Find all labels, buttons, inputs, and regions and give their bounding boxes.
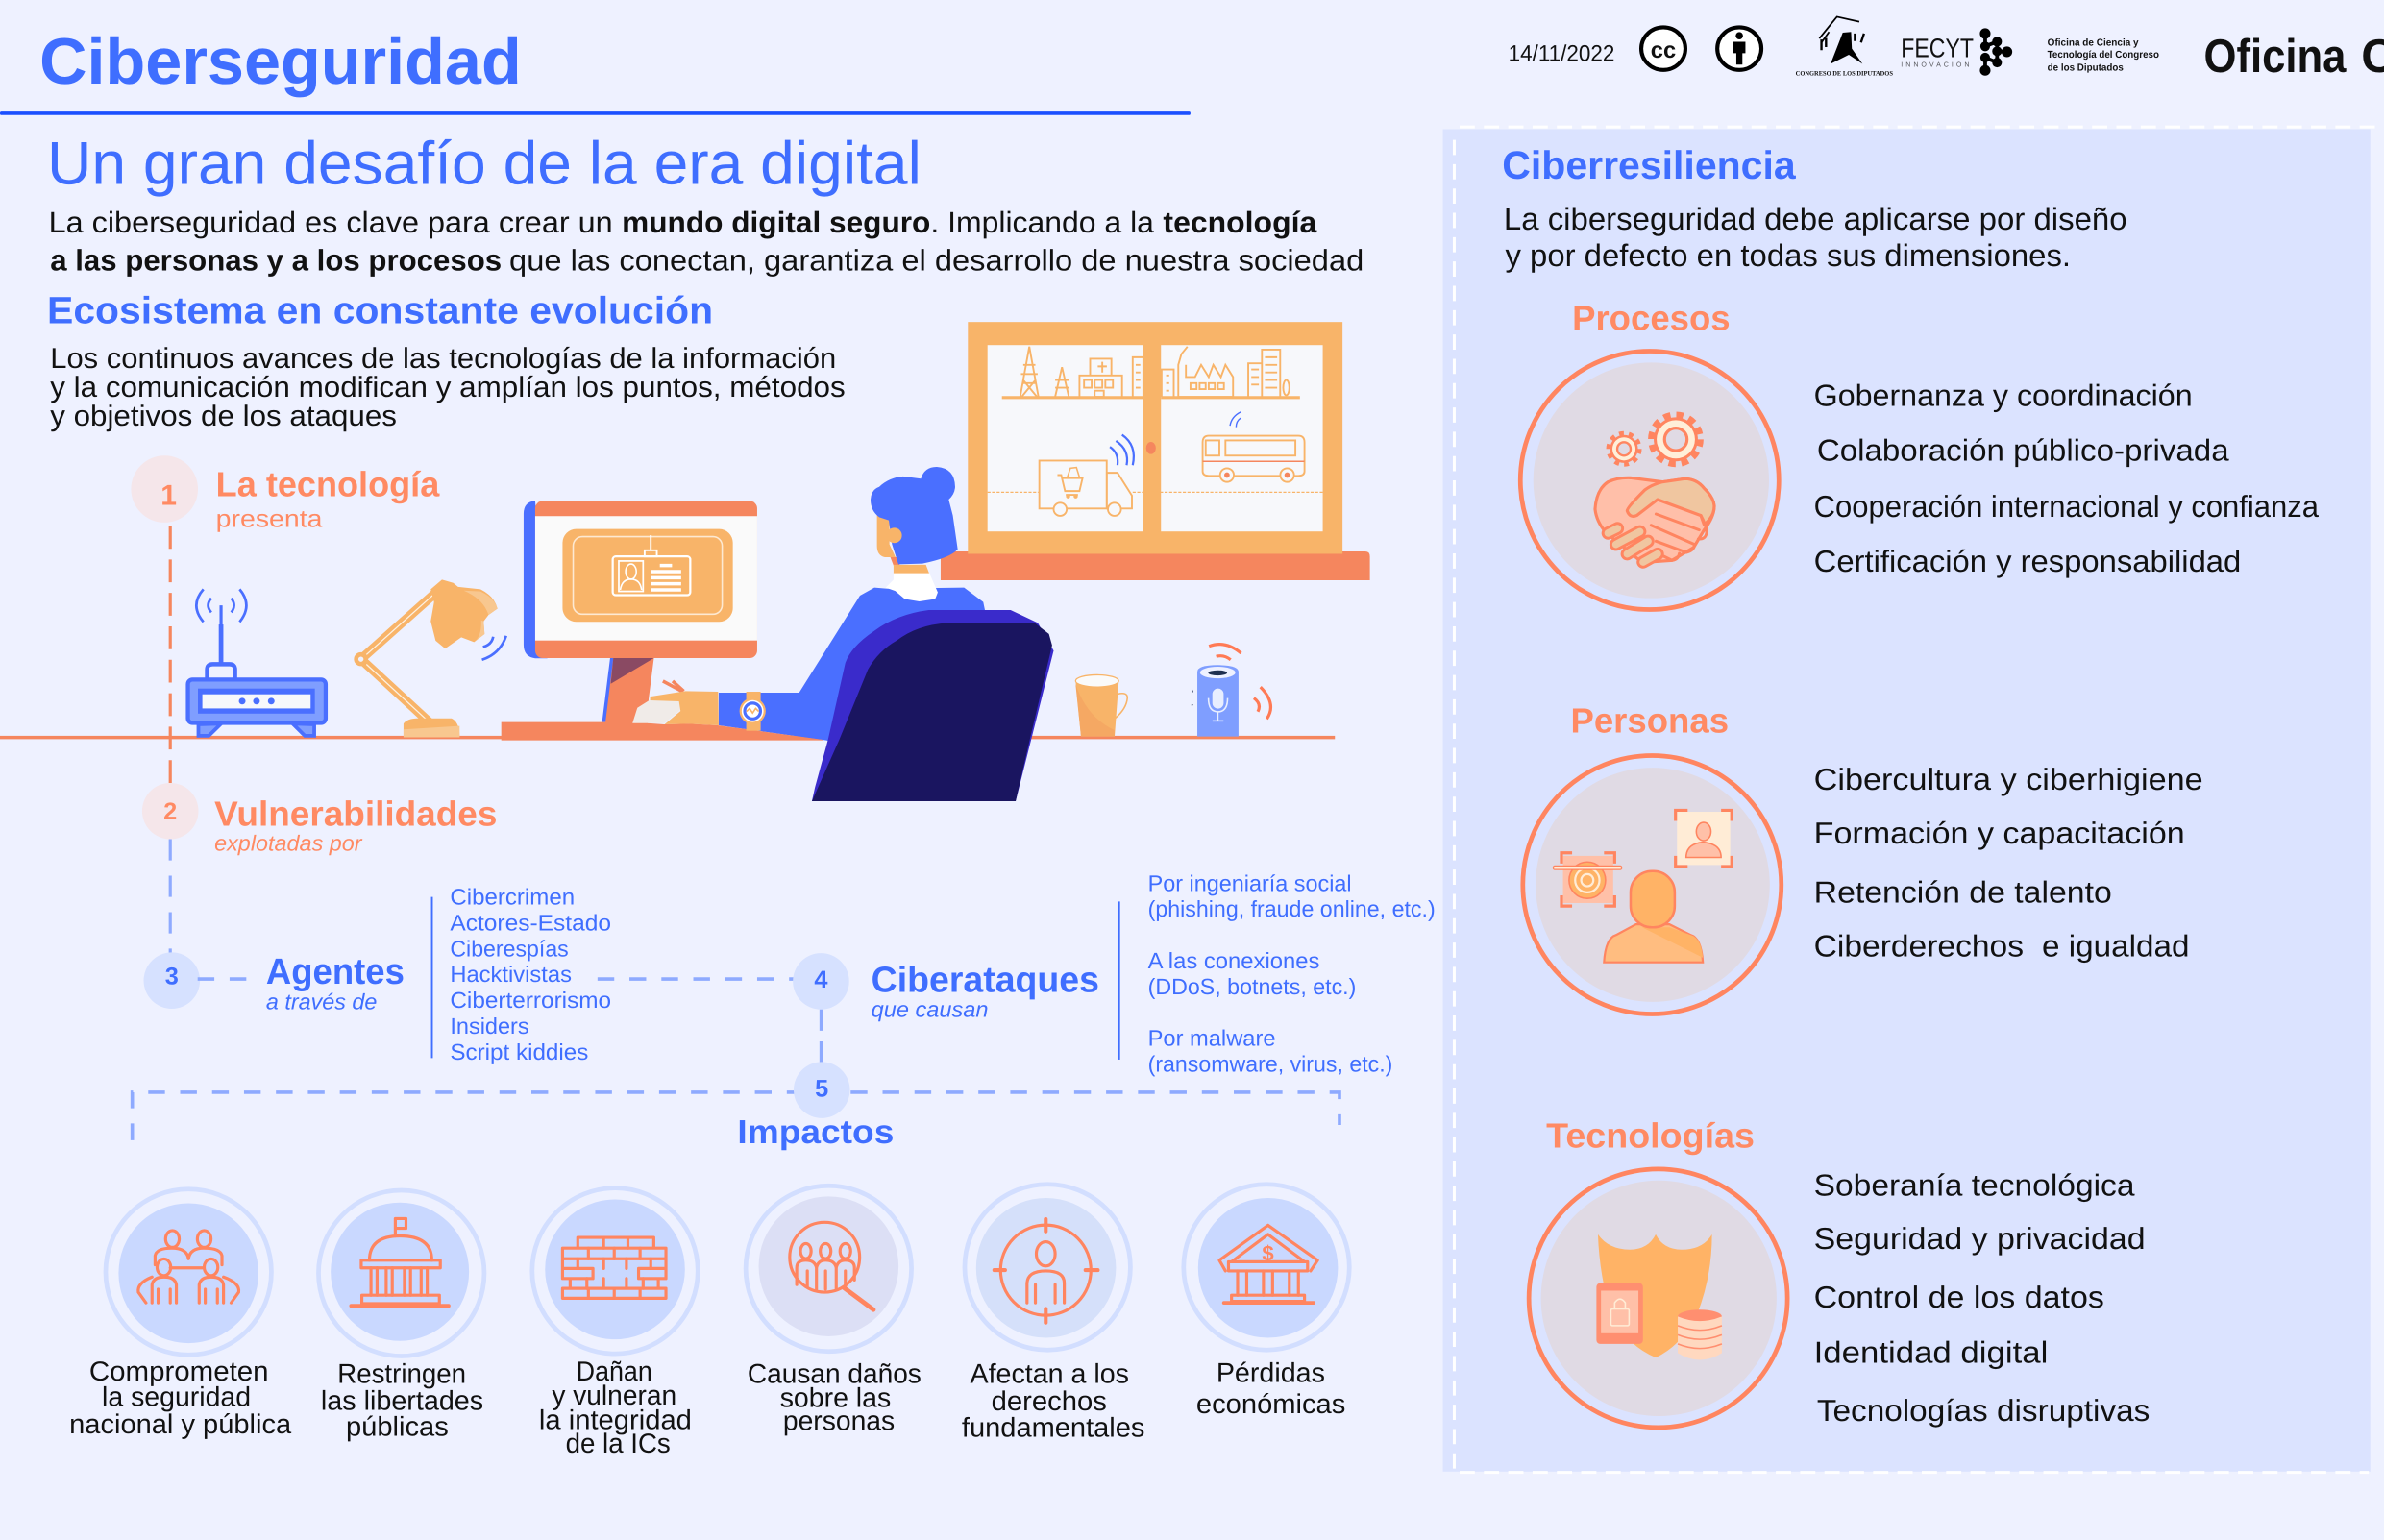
panel heading: Ciberresiliencia: [1502, 142, 1797, 188]
step 1: la tecnología: 1: [160, 480, 178, 512]
desk line: [0, 736, 1335, 739]
step 3: agentes: 3: [165, 965, 179, 990]
step 4: ciberataques: Ciberataques: [872, 960, 1099, 1001]
logo: oficina c: Oficina: [2204, 30, 2347, 83]
personas list: Ciberderechos: [1814, 930, 2024, 964]
person at desk: [502, 467, 1054, 801]
list: attack types: [1148, 872, 1436, 1078]
list: agents: Hacktivistas: [450, 964, 572, 989]
caption: Afectan a los: [970, 1358, 1129, 1389]
icon: bank: [1219, 1225, 1317, 1303]
wifi over bus: [1230, 412, 1241, 428]
logo: fecyt: INNOVACIÓN: [1901, 61, 1970, 68]
personas list: e igualdad: [2042, 930, 2189, 964]
caption: personas: [783, 1406, 895, 1436]
step 1: la tecnología: presenta: [216, 507, 323, 533]
ecosystem text block: [50, 344, 846, 433]
list: agents: Ciberespías: [450, 938, 569, 963]
list: attack types: A las conexiones: [1148, 950, 1319, 974]
caption: públicas: [346, 1411, 449, 1442]
procesos section: Procesos: [1572, 298, 1731, 337]
header: date: 14/11/2022: [1509, 41, 1614, 67]
intro text block: a las personas y a los procesos: [50, 245, 502, 279]
icon: magnifier with people: [790, 1222, 873, 1309]
step 5: impactos: [737, 1062, 894, 1151]
logo: fecyt: FECYT: [1901, 33, 1974, 63]
icon: group of people: [138, 1231, 239, 1303]
logo: fecyt: [1901, 28, 2012, 76]
step 1: la tecnología: [131, 455, 440, 533]
panel intro: y por defecto en todas sus dimensiones.: [1505, 238, 2071, 274]
caption: derechos: [992, 1386, 1107, 1416]
step 2: vulnerabilidades: Vulnerabilidades: [214, 794, 497, 833]
icon: shield, phone and data: [1596, 1234, 1722, 1359]
icon: bank: $: [1262, 1240, 1274, 1265]
procesos list: [1814, 380, 2320, 579]
step 2: vulnerabilidades: 2: [163, 799, 177, 825]
icon: attribution: [1717, 27, 1761, 70]
impact 2: libertades públicas: [318, 1190, 484, 1442]
caption: Dañan: [577, 1357, 652, 1386]
logo: oficina del congreso: Oficina de Ciencia y: [2048, 38, 2139, 49]
icon: capitol building: [352, 1218, 449, 1306]
step 4: ciberataques: que causan: [872, 999, 988, 1023]
caption: [539, 1357, 692, 1458]
caption: la integridad: [539, 1405, 692, 1435]
procesos list: Colaboración público-privada: [1817, 435, 2230, 468]
ecosystem text block: y la comunicación modifican y amplían los puntos, métodos: [50, 373, 846, 404]
city skyline: [1002, 347, 1300, 398]
personas list: Formación y capacitación: [1814, 818, 2185, 851]
logo: congreso: [1796, 16, 1894, 77]
intro text block: . Implicando a la: [930, 207, 1154, 240]
step 3: agentes: [144, 952, 405, 1015]
wrist watch: [740, 692, 766, 731]
caption: y vulneran: [552, 1381, 676, 1410]
personas list: [1814, 764, 2203, 964]
step 5: impactos: Impactos: [737, 1112, 894, 1151]
procesos list: Cooperación internacional y confianza: [1814, 491, 2320, 525]
caption: [1196, 1357, 1345, 1419]
intro text block: La ciberseguridad es clave para crear un: [49, 207, 613, 240]
panel: ciberresiliencia: [1443, 127, 2384, 1473]
impact 3: infraestructuras críticas: [532, 1188, 698, 1458]
procesos section: [1520, 298, 2320, 610]
wifi over truck: [1110, 435, 1134, 465]
list: agents: Actores-Estado: [450, 912, 611, 937]
impact 5: derechos fundamentales: [962, 1185, 1144, 1443]
procesos list: Certificación y responsabilidad: [1814, 546, 2241, 579]
caption: [962, 1358, 1144, 1443]
list: agents: Script kiddies: [450, 1041, 588, 1065]
impact 4: daños a personas: [746, 1186, 922, 1436]
intro text block: [49, 207, 1364, 279]
personas section: [1523, 700, 2203, 1014]
person torso and arm: [719, 588, 988, 760]
list: attack types: (phishing, fraude online, etc.): [1148, 898, 1436, 923]
hand and pen: [632, 699, 680, 723]
intro text block: que las conectan, garantiza el desarrollo de nuestra sociedad: [509, 245, 1364, 279]
step 2: vulnerabilidades: [142, 783, 497, 857]
tecnologías list: Identidad digital: [1814, 1337, 2048, 1371]
caption: Comprometen: [89, 1357, 269, 1386]
icon: desk lamp: [354, 579, 506, 737]
icon: creative commons: cc: [1651, 38, 1676, 63]
list: agents: Insiders: [450, 1015, 529, 1039]
impacts bracket: [133, 1092, 1339, 1140]
tecnologías list: Soberanía tecnológica: [1814, 1170, 2136, 1204]
icon: gears and handshake: [1595, 415, 1714, 562]
icon: mug: [1075, 674, 1127, 737]
tecnologías list: Control de los datos: [1814, 1282, 2104, 1315]
logo: oficina del congreso: [2048, 38, 2159, 74]
icon: smart speaker: [1192, 645, 1270, 737]
heading: ecosistema: Ecosistema en constante evolución: [47, 289, 713, 332]
tecnologías section: [1529, 1116, 2150, 1429]
caption: la seguridad: [102, 1381, 251, 1412]
monitor id card: [562, 529, 733, 622]
title: Ciberseguridad: [39, 26, 522, 99]
window illustration: [941, 322, 1370, 580]
caption: de la ICs: [566, 1429, 671, 1458]
personas list: Cibercultura y ciberhigiene: [1814, 764, 2203, 797]
desk base wedge: [502, 722, 823, 741]
bus: [1203, 436, 1305, 482]
caption: económicas: [1196, 1389, 1345, 1419]
icon: person in target: [995, 1219, 1097, 1323]
caption: [748, 1358, 922, 1436]
caption: nacional y pública: [69, 1409, 293, 1440]
step 3: agentes: a través de: [266, 991, 377, 1015]
caption: Restringen: [337, 1358, 466, 1389]
monitor body: [524, 501, 548, 658]
ecosystem text block: Los continuos avances de las tecnologías de la información: [50, 344, 836, 376]
tecnologías list: Seguridad y privacidad: [1814, 1223, 2146, 1257]
impact 6: pérdidas económicas: [1184, 1185, 1349, 1419]
icon: router: [188, 589, 326, 736]
logo: oficina del congreso: de los Diputados: [2048, 63, 2124, 74]
step 3: agentes: Agentes: [266, 952, 405, 992]
personas section: Personas: [1570, 700, 1729, 741]
caption: [69, 1357, 293, 1440]
icon: creative commons: [1641, 27, 1685, 70]
list: attack types: Por ingeniaría social: [1148, 872, 1352, 897]
impact 1: seguridad nacional: [69, 1189, 293, 1440]
personas list: Retención de talento: [1814, 876, 2112, 910]
caption: sobre las: [780, 1382, 891, 1413]
chair: [812, 610, 1054, 801]
hair: [871, 467, 958, 564]
tecnologías list: [1814, 1170, 2150, 1429]
intro text block: mundo digital seguro: [622, 207, 930, 240]
icon: brick wall: [562, 1237, 666, 1298]
step 4: ciberataques: 4: [814, 967, 828, 993]
list: agents: [450, 887, 611, 1065]
monitor illustration: [524, 501, 757, 723]
road lines: [988, 491, 1323, 493]
step 2: vulnerabilidades: explotadas por: [214, 832, 363, 857]
delivery truck: [1040, 460, 1132, 516]
step 5: impactos: 5: [815, 1077, 828, 1103]
step 1: la tecnología: La tecnología: [216, 464, 440, 504]
ecosystem text block: y objetivos de los ataques: [50, 402, 397, 433]
tecnologías list: Tecnologías disruptivas: [1817, 1395, 2150, 1429]
list: attack types: Por malware: [1148, 1028, 1276, 1052]
list: attack types: (ransomware, virus, etc.): [1148, 1054, 1392, 1078]
heading: gran desafío: Un gran desafío de la era digital: [47, 131, 922, 198]
list: agents: Cibercrimen: [450, 887, 575, 911]
panel intro: La ciberseguridad debe aplicarse por diseño: [1504, 202, 2127, 237]
tecnologías section: Tecnologías: [1546, 1116, 1755, 1156]
step 4: ciberataques: [793, 953, 1099, 1023]
icon: person with biometrics: [1553, 810, 1732, 963]
intro text block: tecnología: [1163, 207, 1316, 240]
caption: [321, 1358, 483, 1442]
logo: oficina del congreso: Tecnología del Congreso: [2048, 50, 2159, 61]
caption: Pérdidas: [1217, 1357, 1325, 1388]
caption: las libertades: [321, 1385, 483, 1416]
caption: Causan daños: [748, 1358, 922, 1389]
list: attack types: (DDoS, botnets, etc.): [1148, 976, 1356, 1000]
logo: congreso: CONGRESO DE LOS DIPUTADOS: [1796, 69, 1894, 77]
monitor stand: [602, 658, 614, 722]
procesos list: Gobernanza y coordinación: [1814, 380, 2193, 413]
caption: fundamentales: [962, 1412, 1144, 1443]
panel intro: [1504, 202, 2127, 274]
list: agents: Ciberterrorismo: [450, 990, 611, 1014]
